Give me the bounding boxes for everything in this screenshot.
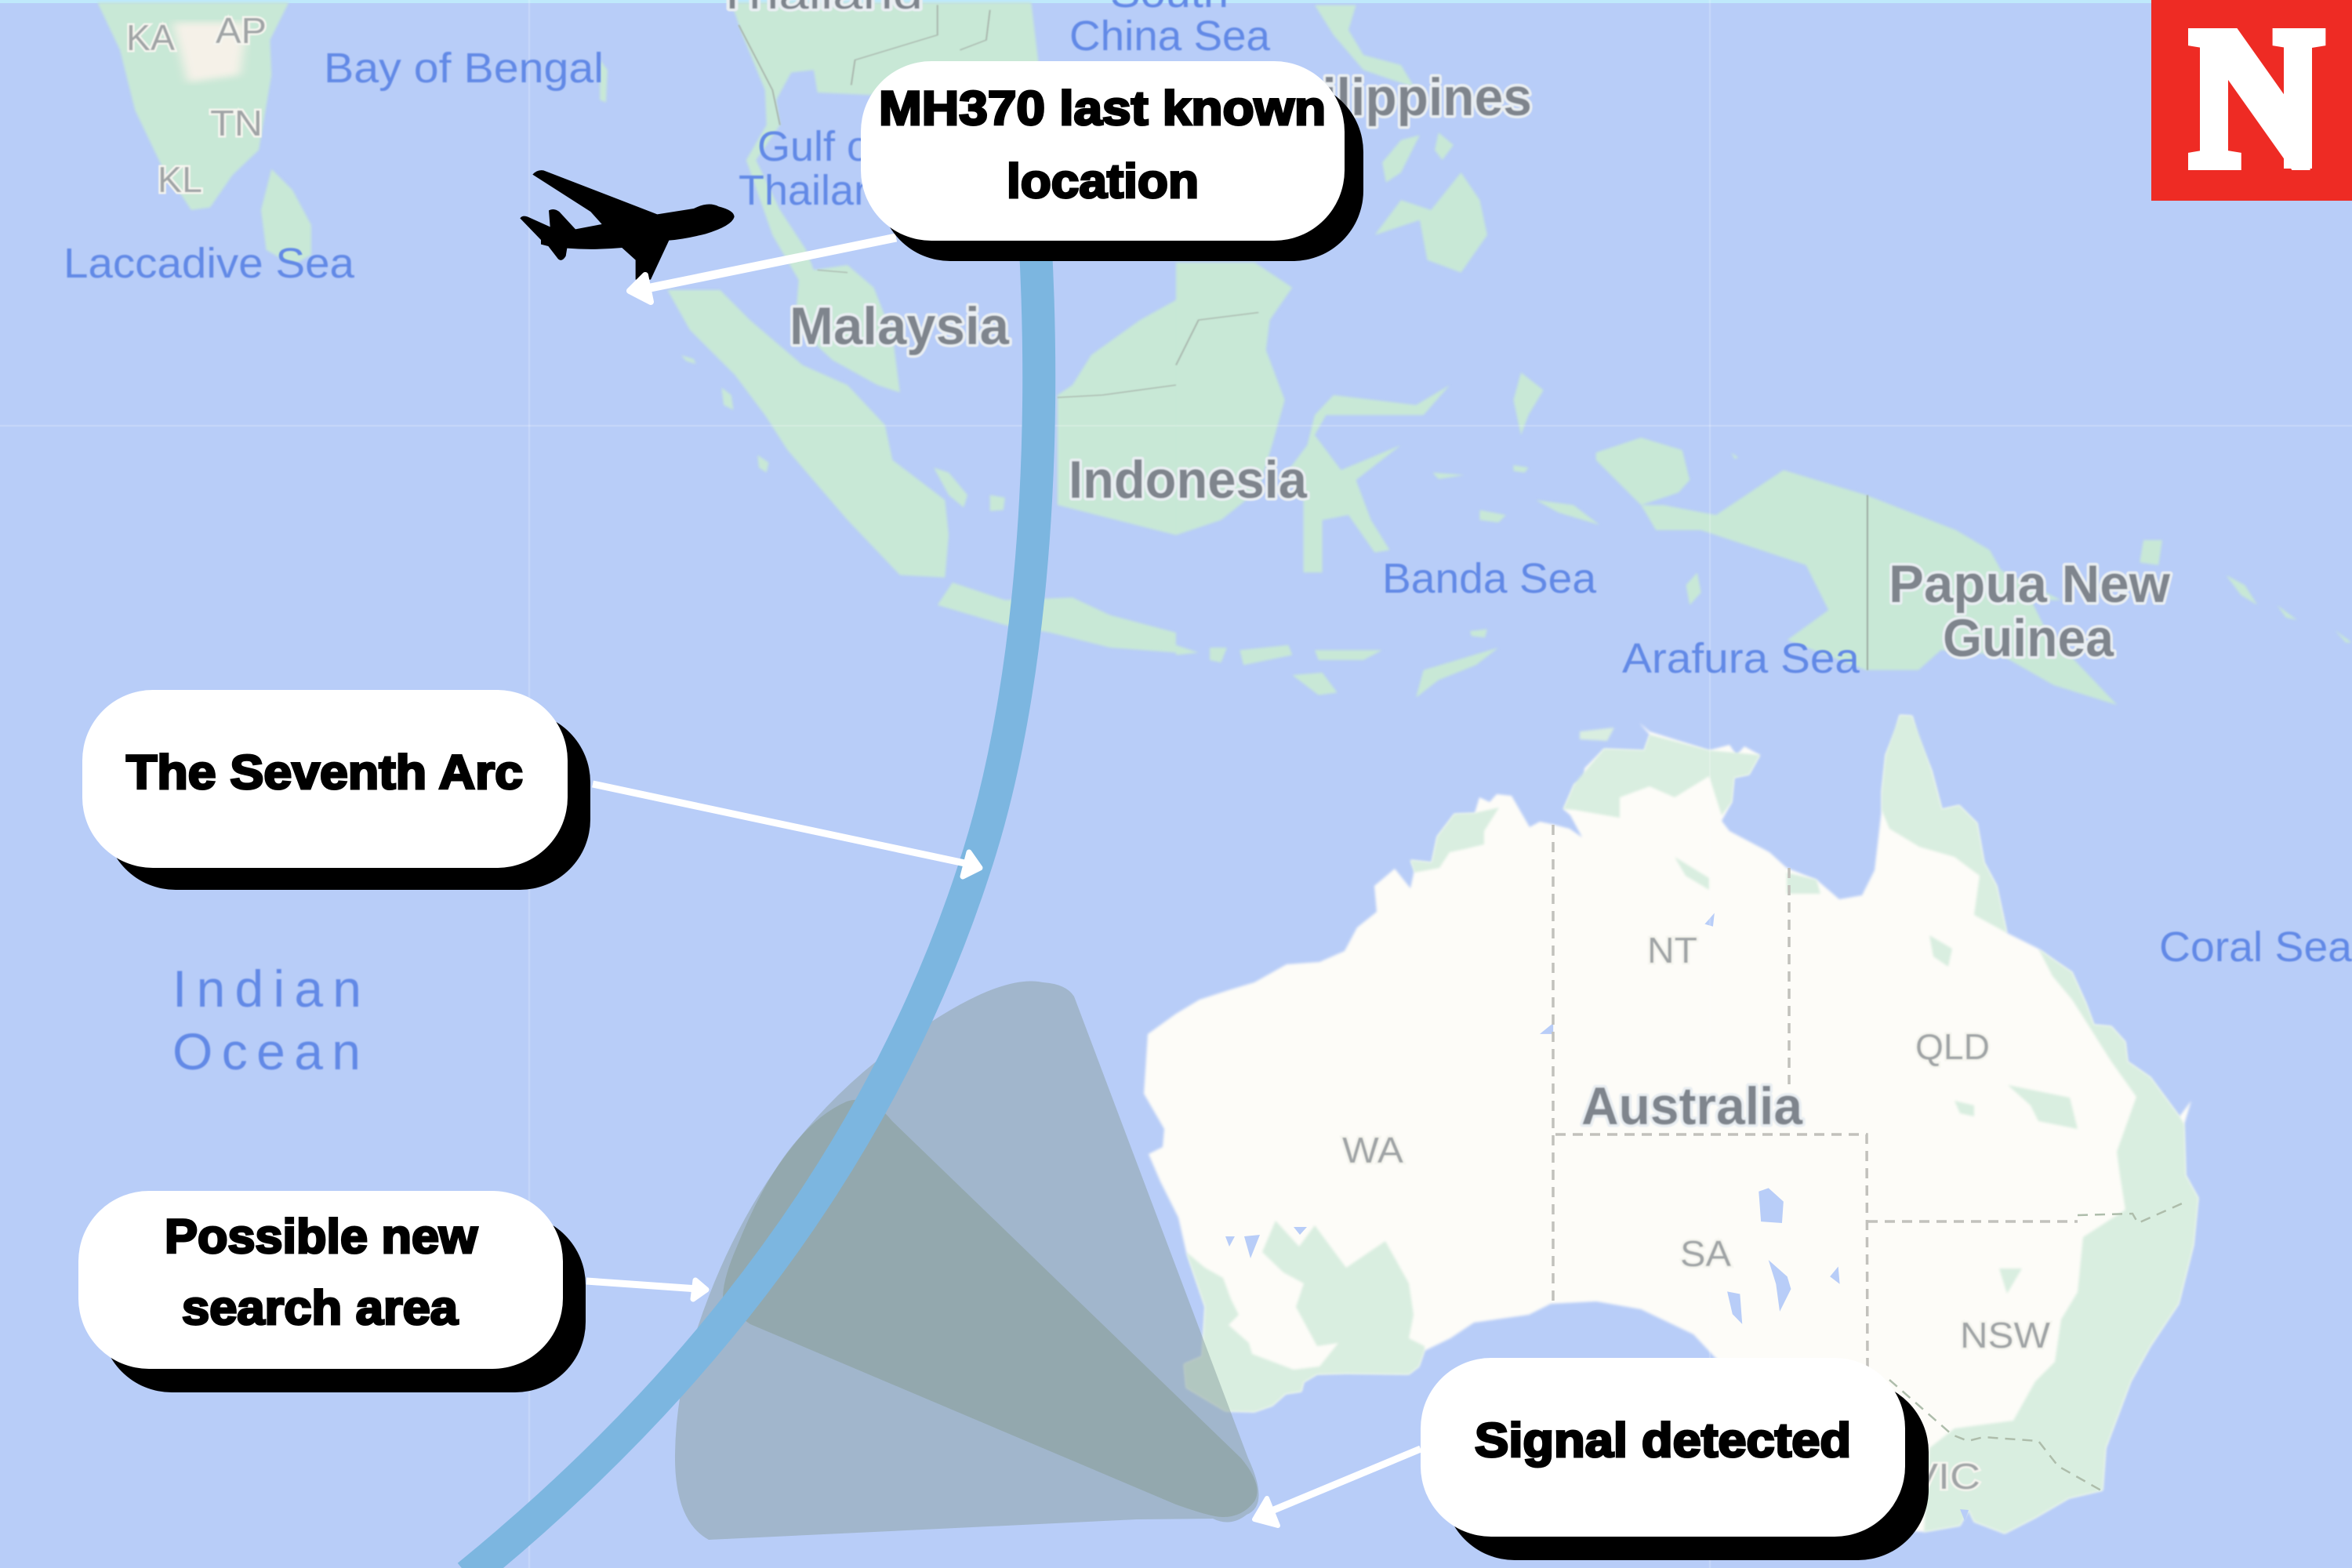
state labels: SA <box>1680 1233 1731 1274</box>
arrow: seventh arc <box>593 784 980 877</box>
country labels: Papua New <box>1889 554 2171 614</box>
green vegetation patches <box>1184 715 2198 1534</box>
sea labels: Laccadive Sea <box>64 240 355 287</box>
state borders <box>1553 825 2187 1490</box>
callout: MH370 last known location <box>861 61 1363 261</box>
callout: Signal detected: Signal detected <box>1475 1414 1851 1467</box>
sea labels: Gulf of <box>757 123 883 170</box>
sea labels: Ocean <box>172 1022 361 1080</box>
callout: Signal detected <box>1421 1358 1929 1560</box>
country labels: Guinea <box>1943 608 2114 668</box>
lakes <box>1225 913 1969 1521</box>
sea labels: Thailand <box>739 167 901 214</box>
sea labels: Banda Sea <box>1382 555 1597 602</box>
sea labels: Coral Sea <box>2159 924 2352 971</box>
country labels: Philippines <box>1256 67 1532 127</box>
state labels <box>126 10 2051 1497</box>
land borders <box>739 5 1867 670</box>
state labels: NSW <box>1960 1315 2051 1356</box>
country labels: Australia <box>1581 1076 1803 1136</box>
state labels: WA <box>1342 1130 1403 1171</box>
state labels: VIC <box>1910 1456 1980 1497</box>
state labels: AP <box>216 10 267 51</box>
sea labels: Indian <box>172 960 361 1018</box>
sea labels: Bay of Bengal <box>324 45 604 92</box>
asia and indonesia landmasses <box>97 2 2352 705</box>
state labels: QLD <box>1915 1026 1990 1067</box>
state labels: KL <box>158 159 202 200</box>
sea labels: Arafura Sea <box>1622 635 1860 682</box>
state labels: TN <box>210 103 263 143</box>
state labels: NT <box>1647 930 1697 971</box>
india interior <box>172 23 248 82</box>
the seventh arc <box>468 235 1039 1568</box>
sea labels: China Sea <box>1069 13 1271 60</box>
callout: The Seventh Arc <box>82 690 590 890</box>
arrow: signal detected <box>1254 1449 1421 1526</box>
possible search area: inner cone <box>723 1100 1258 1517</box>
australia base shape <box>1144 715 2198 1534</box>
country labels: Indonesia <box>1069 450 1308 510</box>
possible search area: outer cone <box>675 981 1259 1540</box>
country labels: Malaysia <box>789 296 1010 356</box>
arrow: possible new search area <box>586 1280 706 1299</box>
callout: MH370 last known location: location <box>1007 154 1199 208</box>
callout: The Seventh Arc: The Seventh Arc <box>126 746 523 799</box>
icon: airplane <box>520 170 735 280</box>
australia landmass <box>1144 715 2198 1534</box>
callout: Possible new search area: search area <box>182 1281 459 1334</box>
arrow: last known location <box>630 238 896 302</box>
state labels: KA <box>126 17 175 58</box>
sea labels <box>64 0 2352 1080</box>
callout: Possible new search area <box>78 1191 586 1392</box>
callout: Possible new search area: Possible new <box>165 1210 478 1263</box>
country labels <box>716 0 2171 1136</box>
callout: MH370 last known location: MH370 last known <box>879 82 1326 135</box>
